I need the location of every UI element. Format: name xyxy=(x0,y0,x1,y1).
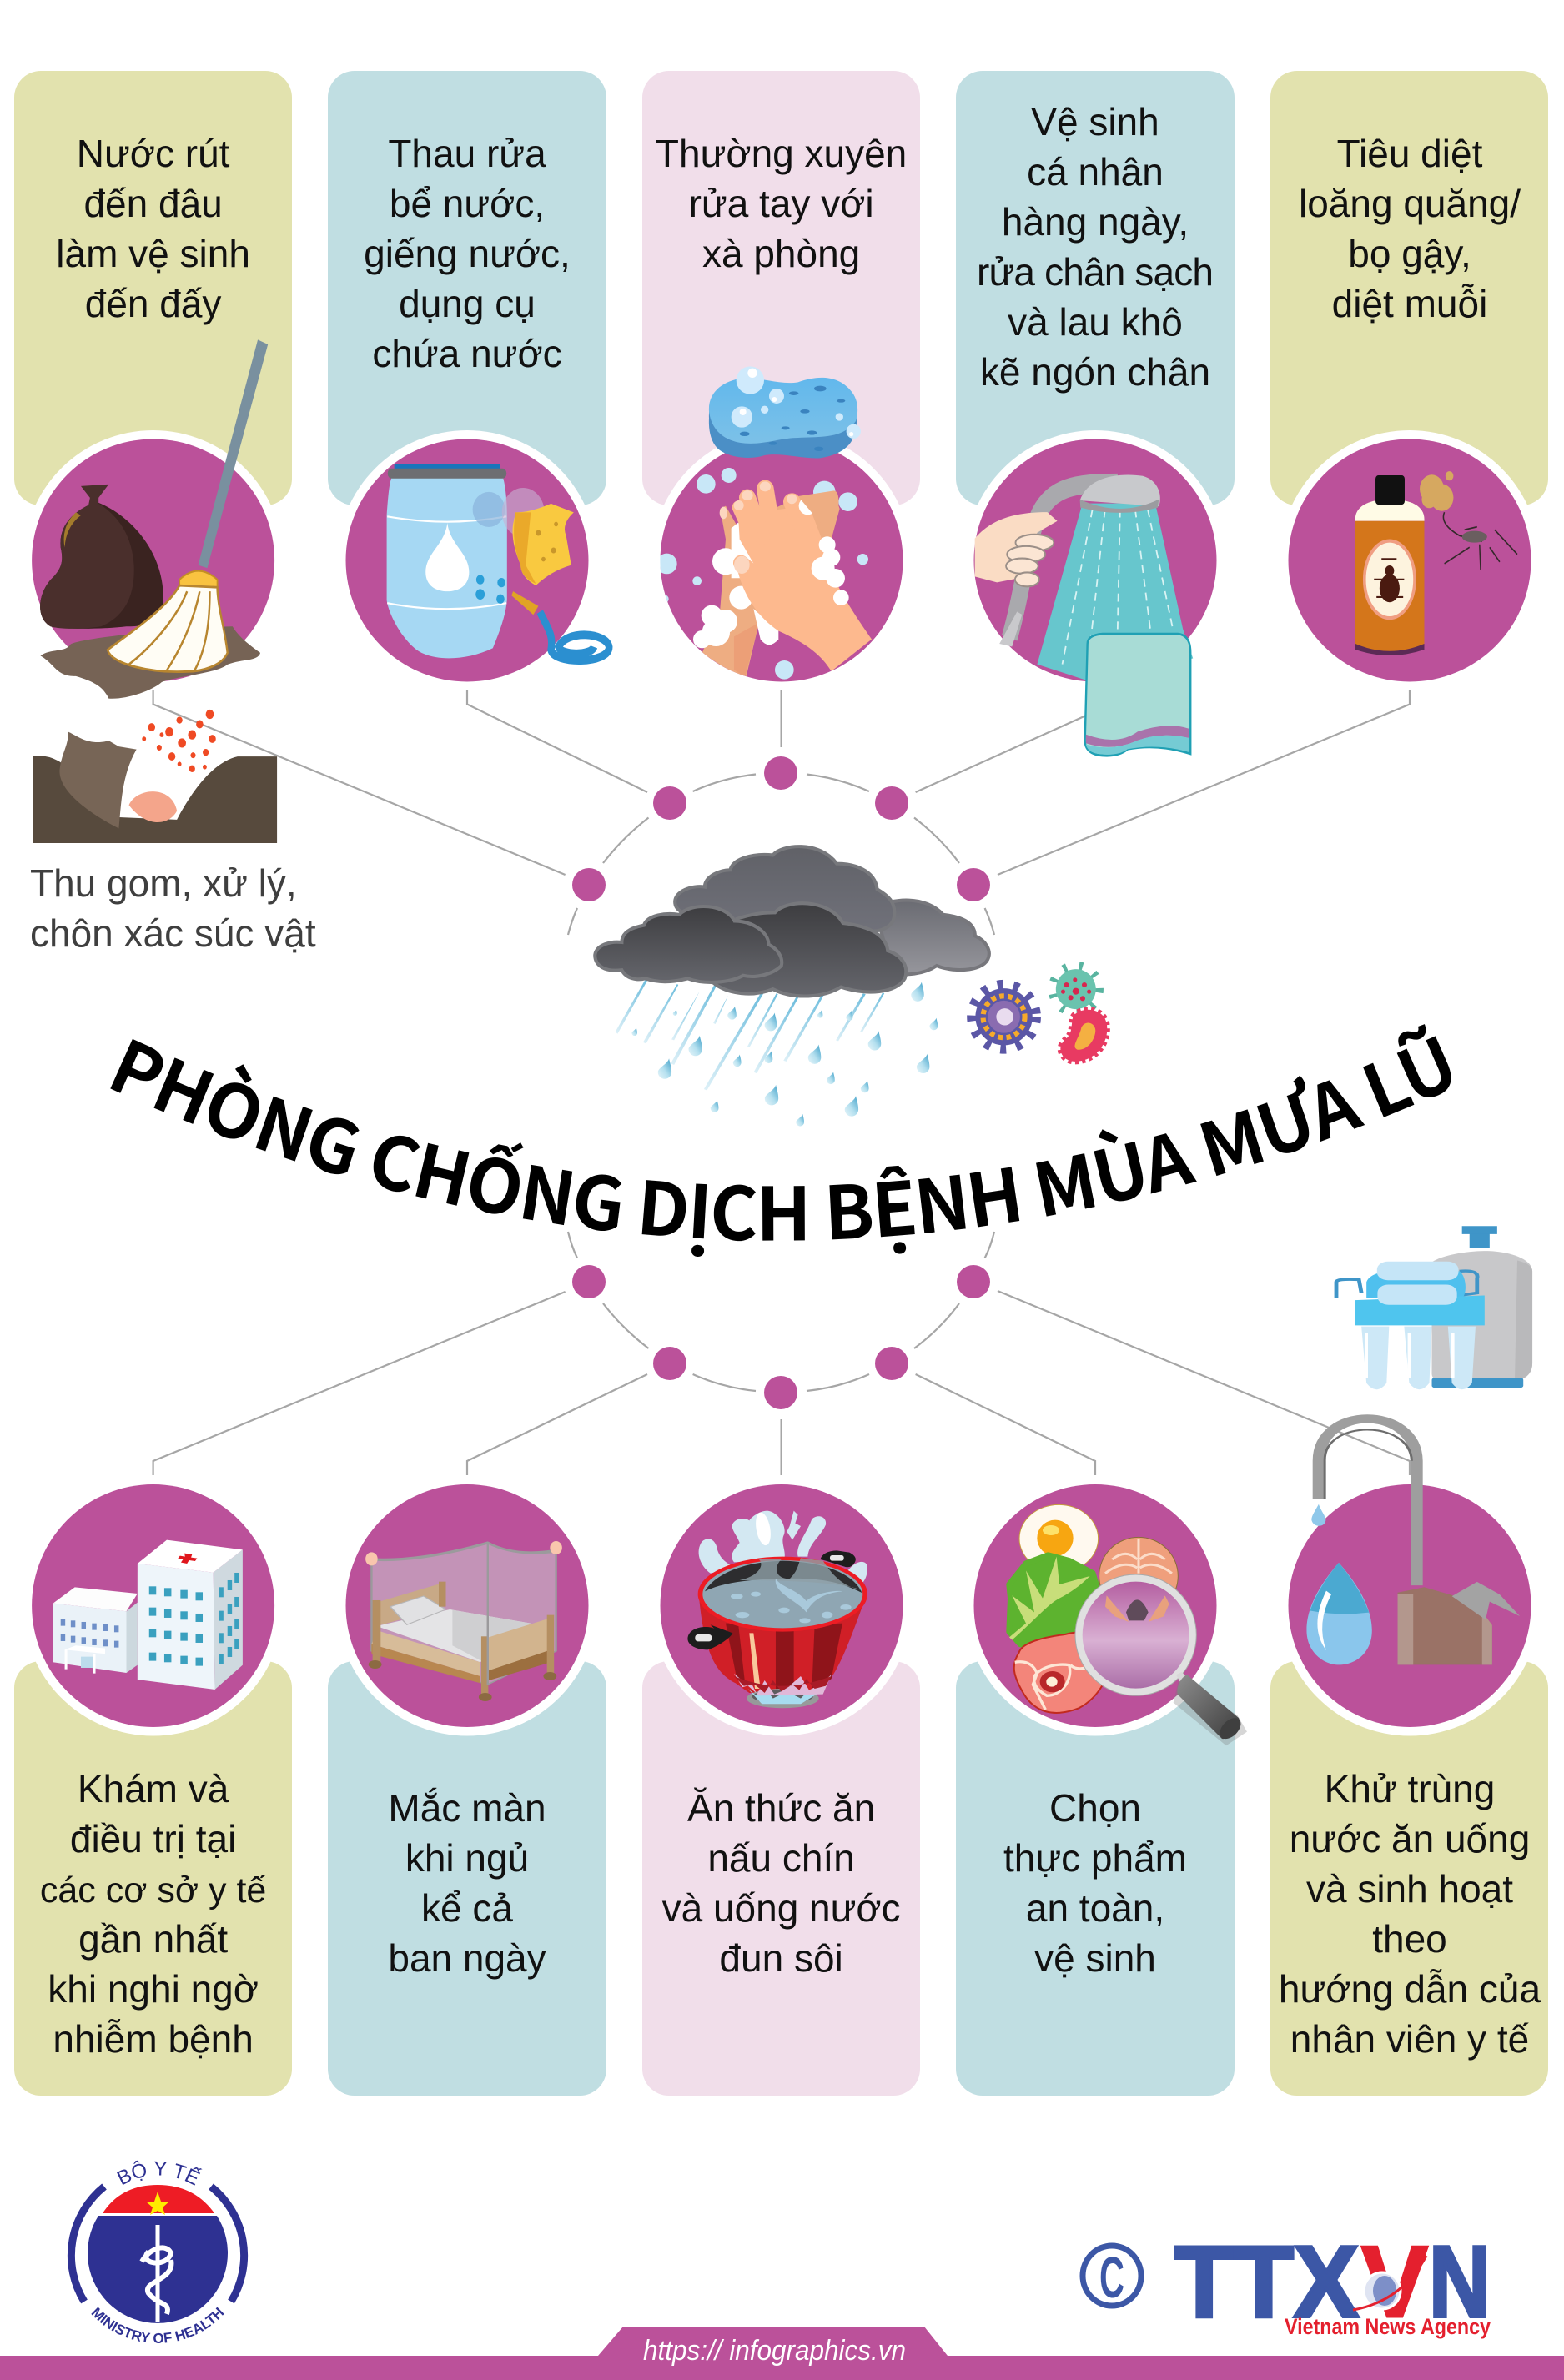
text: disinfect water: nhân viên y tế xyxy=(1290,2017,1529,2061)
text: wash tanks: giếng nước, xyxy=(364,232,571,275)
text: cooked food: Ăn thức ăn xyxy=(687,1786,875,1830)
text: bury carcasses: Thu gom, xử lý, xyxy=(30,861,297,905)
icon: storm clouds and rain xyxy=(595,846,989,1127)
text: cooked food: đun sôi xyxy=(719,1936,843,1980)
text: disinfect water: theo xyxy=(1372,1917,1447,1961)
text: clean up after flood: đến đấy xyxy=(85,282,221,325)
text: bed net: khi ngủ xyxy=(405,1836,529,1880)
text: wash hands: rửa tay với xyxy=(689,182,874,225)
icon circles top row xyxy=(23,430,1540,690)
text: clean up after flood: đến đâu xyxy=(83,182,223,225)
icon: faucet and water drop xyxy=(1306,1418,1520,1664)
logo: TTXVN: V xyxy=(1361,2225,1428,2338)
panel: bottom row backgrounds xyxy=(14,1661,1548,2096)
text: disinfect water: hướng dẫn của xyxy=(1279,1967,1541,2011)
logo: TTXVN: N xyxy=(1429,2225,1491,2338)
footer band with url xyxy=(0,2327,1564,2380)
text: wash tanks: bể nước, xyxy=(390,182,545,225)
text: see doctor: khi nghi ngờ xyxy=(48,1967,259,2011)
text: disinfect water: nước ăn uống xyxy=(1290,1817,1530,1860)
text: bed net: Mắc màn xyxy=(388,1786,546,1830)
icon: boiling pot xyxy=(687,1511,867,1708)
icon: washing hands and sponge xyxy=(656,366,872,681)
text: see doctor: điều trị tại xyxy=(70,1817,236,1860)
text: see doctor: gần nhất xyxy=(78,1917,228,1961)
icon: water barrel and sponge xyxy=(387,464,609,660)
text: see doctor: các cơ sở y tế xyxy=(40,1870,266,1911)
icon: insect spray and mosquito xyxy=(1355,471,1517,655)
hub dots ring xyxy=(572,756,990,1409)
text: see doctor: Khám và xyxy=(78,1767,229,1810)
logo: Ministry of Health xyxy=(67,2160,249,2343)
text: personal hygiene: rửa chân sạch xyxy=(977,250,1214,294)
icon: water filter system xyxy=(1336,1226,1532,1389)
text: kill larvae: bọ gậy, xyxy=(1348,232,1471,275)
text: wash tanks: chứa nước xyxy=(372,332,562,375)
text: bed net: ban ngày xyxy=(388,1936,546,1980)
text: wash hands: xà phòng xyxy=(702,232,860,275)
text: clean up after flood: làm vệ sinh xyxy=(56,232,250,275)
text: personal hygiene: kẽ ngón chân xyxy=(980,350,1210,394)
icon circles bottom row xyxy=(23,1476,1540,1736)
text: disinfect water: và sinh hoạt xyxy=(1306,1867,1513,1911)
footer band with url: https:// infographics.vn xyxy=(643,2335,906,2367)
logo: TTXVN: Vietnam News Agency xyxy=(1285,2314,1491,2339)
icon: shower and towel xyxy=(975,474,1193,756)
text: bed net: kể cả xyxy=(421,1886,513,1930)
text: cooked food: nấu chín xyxy=(707,1836,855,1880)
logo: Ministry of Health: BỘ Y TẾ xyxy=(117,2160,202,2186)
text: wash hands: Thường xuyên xyxy=(656,132,907,175)
text: kill larvae: loăng quăng/ xyxy=(1299,182,1521,225)
text: disinfect water: Khử trùng xyxy=(1325,1767,1495,1810)
text: kill larvae: diệt muỗi xyxy=(1332,282,1487,325)
text: safe food: an toàn, xyxy=(1026,1886,1164,1930)
text: personal hygiene: Vệ sinh xyxy=(1031,100,1159,143)
text: personal hygiene: và lau khô xyxy=(1008,300,1183,344)
icon: hospital buildings xyxy=(53,1540,243,1690)
logo: TTXVN: TTX xyxy=(1174,2225,1359,2338)
text: wash tanks: dụng cụ xyxy=(399,282,536,325)
title: PHÒNG CHỐNG DỊCH BỆNH MÙA MƯA LŨ xyxy=(110,1024,1451,1257)
logo: TTXVN: C xyxy=(1099,2245,1124,2310)
text: safe food: vệ sinh xyxy=(1034,1936,1156,1980)
text: wash tanks: Thau rửa xyxy=(388,132,546,175)
text: see doctor: nhiễm bệnh xyxy=(53,2017,254,2061)
text: clean up after flood: Nước rút xyxy=(77,132,230,175)
text: safe food: Chọn xyxy=(1049,1786,1141,1830)
icon: trash bag and mop xyxy=(40,339,268,699)
logo: TTXVN xyxy=(1083,2225,1491,2339)
icon: animal burial pit xyxy=(33,710,277,843)
panel: wash row top backgrounds xyxy=(14,71,1548,505)
text: safe food: thực phẩm xyxy=(1003,1836,1187,1880)
text: personal hygiene: cá nhân xyxy=(1027,150,1164,193)
icon: viruses and bacteria xyxy=(973,967,1107,1062)
text: bury carcasses: chôn xác súc vật xyxy=(30,911,316,955)
text: cooked food: và uống nước xyxy=(662,1886,901,1930)
text: kill larvae: Tiêu diệt xyxy=(1337,132,1483,175)
logo: Ministry of Health: MINISTRY OF HEALTH xyxy=(91,2307,224,2343)
icon: bed with mosquito net xyxy=(365,1541,562,1701)
icon: food and magnifier xyxy=(1009,1504,1247,1745)
connector lines xyxy=(153,690,1410,1475)
text: personal hygiene: hàng ngày, xyxy=(1002,200,1189,244)
